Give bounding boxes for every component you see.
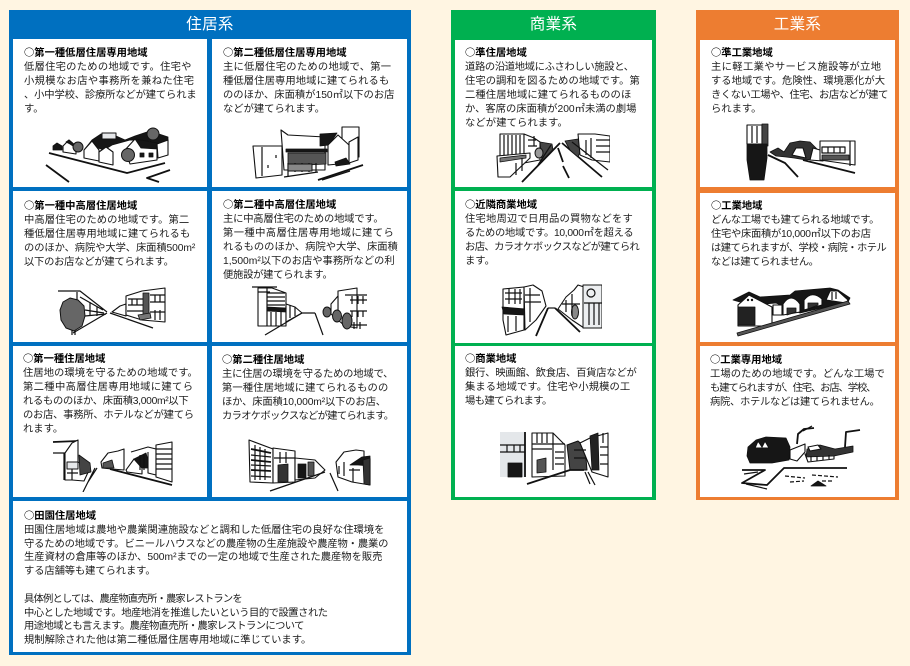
text: 第二種中高層住居地域: 主に中高層住宅のための地域です。 (223, 214, 384, 225)
illustration: residential street (52, 439, 173, 492)
text: 第二種中高層住居地域: 1,500m²以下のお店や事務所などの利 (223, 256, 395, 267)
text: 田園住居地域 (24, 507, 388, 646)
text: 第二種中高層住居地域: 第一種中高層住居専用地域に建てら (223, 228, 394, 239)
text: 近隣商業地域: 住宅地周辺で日用品の買物などをす (465, 214, 633, 225)
text: 商業地域: 集まる地域です。住宅や小規模の工 (465, 382, 630, 393)
text: 商業地域 (465, 350, 637, 407)
text: 第二種住居地域: 主に住居の環境を守るための地域で、 (222, 369, 393, 380)
text: 第二種低層住居専用地域: ののほか、床面積が150㎡以下のお店 (223, 90, 394, 101)
illustration: commercial street (500, 432, 609, 486)
text: 準工業地域: きくない工場や、住宅、お店などが建て (711, 90, 888, 101)
zone card: 準住居地域 (455, 40, 652, 187)
text: 第一種住居地域: のお店、事務所、ホテルなどが建てら (23, 410, 194, 421)
text: 第一種住居地域: れるもののほか、床面積3,000m²以下 (23, 396, 188, 407)
illustration: industrial plant (741, 426, 860, 490)
text: 工業地域: ○工業地域 (711, 197, 762, 212)
text: 近隣商業地域: お店、カラオケボックスなどが建てられ (465, 242, 639, 253)
text: 第一種低層住居専用地域: 低層住宅のための地域です。住宅や (24, 62, 192, 73)
text: 第二種住居地域: ほか、床面積10,000m²以下のお店、 (222, 397, 386, 408)
text: 第二種住居地域: ○第二種住居地域 (222, 351, 304, 366)
text: 商業地域: 場も建てられます。 (465, 396, 552, 407)
text: 準住居地域 (465, 44, 640, 129)
text: 第二種住居地域: 第一種住居地域に建てられるものの (222, 383, 388, 394)
zone card: 工業専用地域 (700, 346, 895, 497)
text: 第二種低層住居専用地域: 種低層住居専用地域に建てられるも (223, 76, 389, 87)
text: 第一種低層住居専用地域 (24, 44, 196, 115)
text: 第一種住居地域: ○第一種住居地域 (23, 350, 105, 365)
panel: 住居系 (9, 10, 411, 655)
zone card: 田園住居地域 (13, 501, 407, 652)
zone card: 近隣商業地域 (455, 191, 652, 343)
text: 田園住居地域: 生産資材の倉庫等のほか、500m²までの一定の地域で生産された農産物を販売 (24, 552, 382, 563)
text: 第一種住居地域: れます。 (23, 424, 63, 435)
text: 田園住居地域: 守るための地域です。ビニールハウスなどの農産物の生産施設や農産物・農業の (24, 539, 388, 550)
text: 工業専用地域: も建てられますが、住宅、お店、学校、 (710, 383, 875, 394)
text: 近隣商業地域: ○近隣商業地域 (465, 196, 537, 211)
zone card: 準工業地域 (700, 40, 895, 187)
text: 第一種中高層住居地域: ○第一種中高層住居地域 (24, 197, 137, 212)
text: 第二種中高層住居地域: 便施設が建てられます。 (223, 270, 332, 281)
panel: 商業系 (451, 10, 656, 500)
text: 第二種低層住居専用地域: 主に低層住宅のための地域で、第一 (223, 62, 391, 73)
text: 工業地域: 住宅や床面積が10,000㎡以下のお店 (711, 229, 871, 240)
text: 田園住居地域: 中心とした地域です。地産地消を推進したいという目的で設置された (24, 608, 328, 619)
illustration: low-rise houses (46, 128, 170, 183)
text: 第一種低層住居専用地域: 、小中学校、診療所などが建てられま (24, 90, 196, 101)
text: 準工業地域: 主に軽工業やサービス施設等が立地 (711, 62, 881, 73)
text: 工業専用地域: 工場のための地域です。どんな工場で (710, 369, 885, 380)
text: 商業地域: 銀行、映画館、飲食店、百貨店などが (465, 368, 637, 379)
text: 商業地域: ○商業地域 (465, 350, 516, 365)
text: 準工業地域: ○準工業地域 (711, 44, 773, 59)
text: 準住居地域: 二種住居地域に建てられるもののほ (465, 90, 631, 101)
text: 工業地域: は建てられますが、学校・病院・ホテル (711, 243, 886, 254)
text: 準住居地域: などが建てられます。 (465, 118, 568, 129)
text: 工業地域: どんな工場でも建てられる地域です。 (711, 215, 879, 226)
illustration: mid-rise buildings and road (252, 286, 367, 336)
text: 田園住居地域: 具体例としては、農産物直売所・農家レストランを (24, 594, 242, 605)
zone card: 商業地域 (455, 346, 652, 497)
text: 第二種低層住居専用地域: などが建てられます。 (223, 104, 325, 115)
text: 工業地域 (711, 197, 886, 268)
text: 工業専用地域: ○工業専用地域 (710, 351, 782, 366)
illustration: light industry street (746, 124, 856, 180)
text: 第一種中高層住居地域: 種低層住居専用地域に建てられるも (24, 229, 190, 240)
text: 田園住居地域: する店舗等も建てられます。 (24, 566, 156, 577)
text: 準住居地域: 道路の沿道地域にふさわしい施設と、 (465, 62, 634, 73)
text: 準住居地域: か、客席の床面積が200㎡未満の劇場 (465, 104, 636, 115)
text: 第一種住居地域: 住居地の環境を守るための地域です。 (23, 368, 198, 379)
text: 第一種中高層住居地域: ののほか、病院や大学、床面積500m² (24, 243, 195, 254)
text: 準住居地域: ○準住居地域 (465, 44, 527, 59)
text: 第一種中高層住居地域 (24, 197, 196, 268)
illustration: factory buildings (732, 288, 850, 336)
text: 第一種住居地域 (23, 350, 198, 435)
text: 第二種中高層住居地域: ○第二種中高層住居地域 (223, 196, 336, 211)
text: 近隣商業地域 (465, 196, 640, 267)
text: 第二種中高層住居地域: れるもののほか、病院や大学、床面積 (223, 242, 398, 253)
text: 田園住居地域: 規制解除された他は第二種低層住居専用地域に準じています。 (24, 635, 311, 646)
text: 第二種低層住居専用地域 (223, 44, 394, 115)
text: 田園住居地域: 用途地域とも言えます。農産物直売所・農家レストランについて (24, 621, 304, 632)
illustration: neighborhood shops (502, 284, 602, 336)
text: 第一種低層住居専用地域: 小規模なお店や事務所を兼ねた住宅 (24, 76, 194, 87)
panel: 工業系 (696, 10, 899, 500)
zone card: 第一種中高層住居地域 (13, 191, 207, 342)
text: 第一種低層住居専用地域: す。 (24, 104, 44, 115)
heading: 住居系: 住居系 (186, 16, 234, 33)
illustration: mid-rise street with tree (58, 288, 166, 335)
text: 田園住居地域: ○田園住居地域 (24, 507, 96, 522)
text: 第一種中高層住居地域: 中高層住宅のための地域です。第二 (24, 215, 189, 226)
zone card: 第一種低層住居専用地域 (13, 39, 207, 187)
text: 第二種住居地域 (222, 351, 393, 422)
text: 工業地域: などは建てられません。 (711, 257, 818, 268)
text: 第二種住居地域: カラオケボックスなどが建てられます。 (222, 411, 393, 422)
zone card: 第二種住居地域 (212, 346, 407, 497)
text: 準工業地域: られます。 (711, 104, 761, 115)
zone card: 第二種中高層住居地域 (212, 191, 407, 342)
illustration: roadside street (496, 134, 610, 183)
text: 第一種低層住居専用地域: ○第一種低層住居専用地域 (24, 44, 148, 59)
text: 近隣商業地域: ます。 (465, 256, 495, 267)
text: 第二種中高層住居地域 (223, 196, 398, 281)
text: 第二種低層住居専用地域: ○第二種低層住居専用地域 (223, 44, 347, 59)
text: 工業専用地域 (710, 351, 885, 408)
text: 準工業地域 (711, 44, 888, 115)
text: 工業専用地域: 病院、ホテルなどは建てられません。 (710, 397, 880, 408)
heading: 工業系: 工業系 (774, 16, 821, 33)
heading: 商業系: 商業系 (530, 16, 577, 33)
zone card: 工業地域 (700, 193, 895, 342)
text: 準工業地域: する地域です。危険性、環境悪化が大 (711, 76, 885, 87)
text: 第一種中高層住居地域: 以下のお店などが建てられます。 (24, 257, 174, 268)
text: 田園住居地域: 田園住居地域は農地や農業関連施設などと調和した低層住宅の良好な住環境を (24, 525, 384, 536)
illustration: shop and houses (252, 126, 364, 181)
zone card: 第一種住居地域 (13, 346, 207, 497)
text: 第一種住居地域: 第二種中高層住居専用地域に建てら (23, 382, 193, 393)
illustration: apartments and street (248, 440, 371, 492)
zone card: 第二種低層住居専用地域 (212, 39, 407, 187)
text: 準住居地域: 住宅の調和を図るための地域です。第 (465, 76, 640, 87)
text: 近隣商業地域: るための地域です。10,000㎡を超える (465, 228, 633, 239)
